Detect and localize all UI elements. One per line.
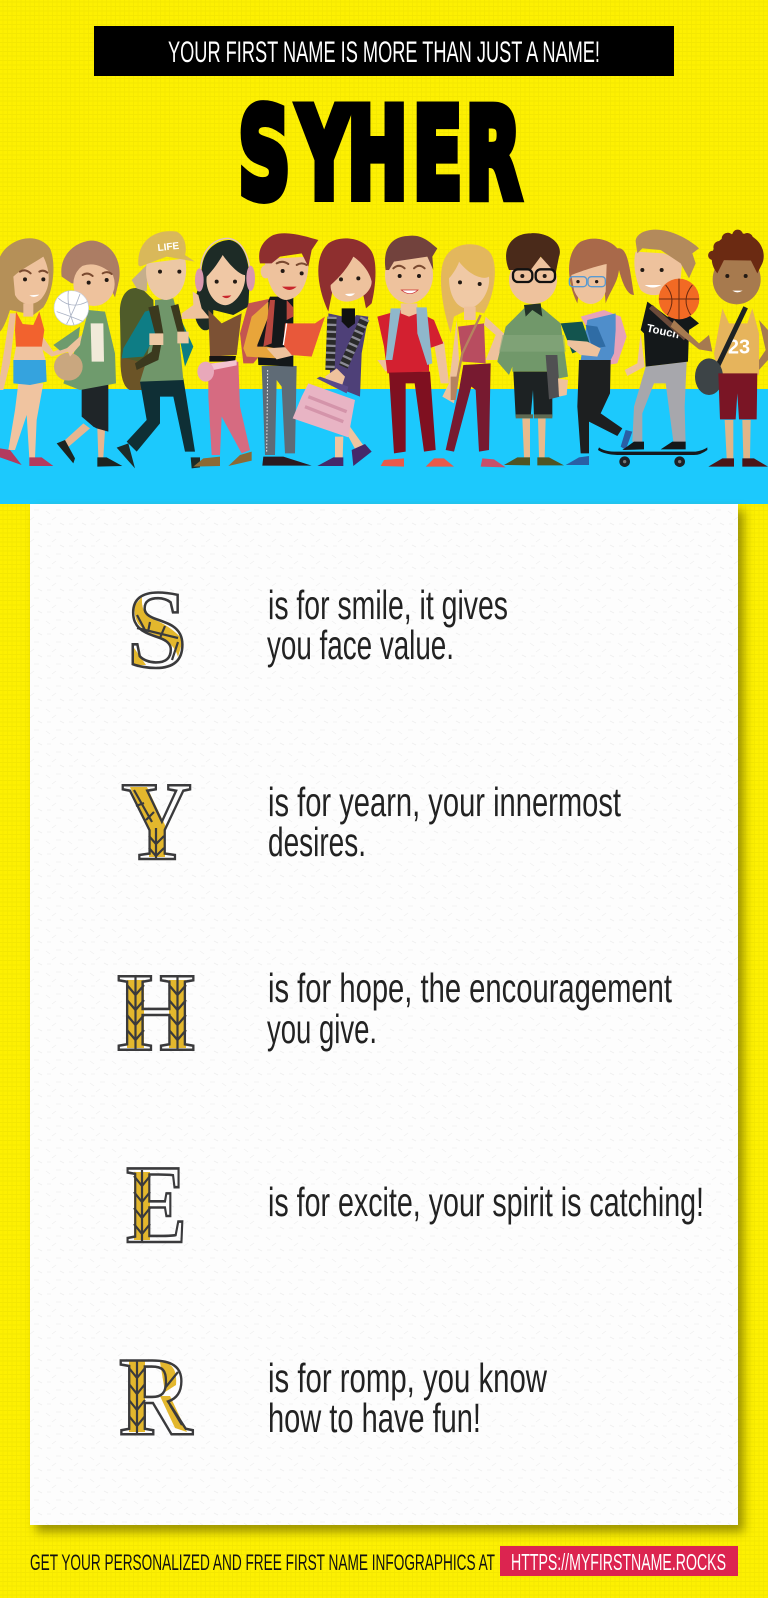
people group: left half (0, 231, 376, 468)
row 1: letter S: S (127, 568, 187, 692)
row 3: letter H: H (117, 951, 195, 1075)
title: name: SYHER (238, 82, 521, 226)
row 1 text: you face value. (267, 622, 454, 668)
person 10: girl with tablet (561, 239, 634, 465)
person 4: girl with headphones (182, 238, 255, 467)
row 5 text: how to have fun! (268, 1395, 481, 1441)
person 12: boy in yellow jersey: 23 (728, 336, 750, 358)
row 5 text (268, 1355, 547, 1441)
row 5 text: is for romp, you know (268, 1355, 547, 1401)
row 2 text: is for yearn, your innermost (268, 779, 621, 825)
row 1 text: is for smile, it gives (268, 582, 508, 628)
row 2 text (268, 779, 621, 865)
person 3: hiker with backpack and cap (117, 231, 200, 468)
person 11: boy on skateboard with basketball: Touch (645, 323, 680, 341)
person 6: girl with pink bag (293, 238, 376, 466)
row 3 text: you give. (267, 1006, 377, 1052)
floor band (0, 389, 768, 504)
people group: right half (377, 230, 768, 467)
person 7: boy in red shirt (377, 236, 454, 467)
skateboard (598, 447, 707, 467)
card shadow (36, 510, 744, 1532)
person 3: hiker with backpack and cap: LIFE (157, 241, 180, 254)
top banner (94, 26, 674, 76)
row 2 text: desires. (268, 819, 366, 865)
row 2: letter Y: Y (121, 760, 192, 884)
row 1 text (267, 582, 508, 668)
row 4: letter E: E (126, 1143, 187, 1267)
footer call to action text: GET YOUR PERSONALIZED AND FREE FIRST NAME INFOGRAPHICS AT (30, 1550, 495, 1575)
person 12: boy in yellow jersey (695, 230, 768, 467)
row 5: letter R: R (119, 1335, 193, 1459)
row 3 text (267, 965, 672, 1052)
white card panel (30, 504, 738, 1525)
person 8: blonde girl (441, 244, 506, 467)
person 2: girl with volleyball (53, 241, 122, 467)
person 11: boy on skateboard with basketball (622, 230, 712, 450)
person 1: girl in orange top (0, 238, 80, 466)
person 5: boy with book (240, 233, 325, 466)
person 9: boy with glasses (497, 233, 568, 465)
